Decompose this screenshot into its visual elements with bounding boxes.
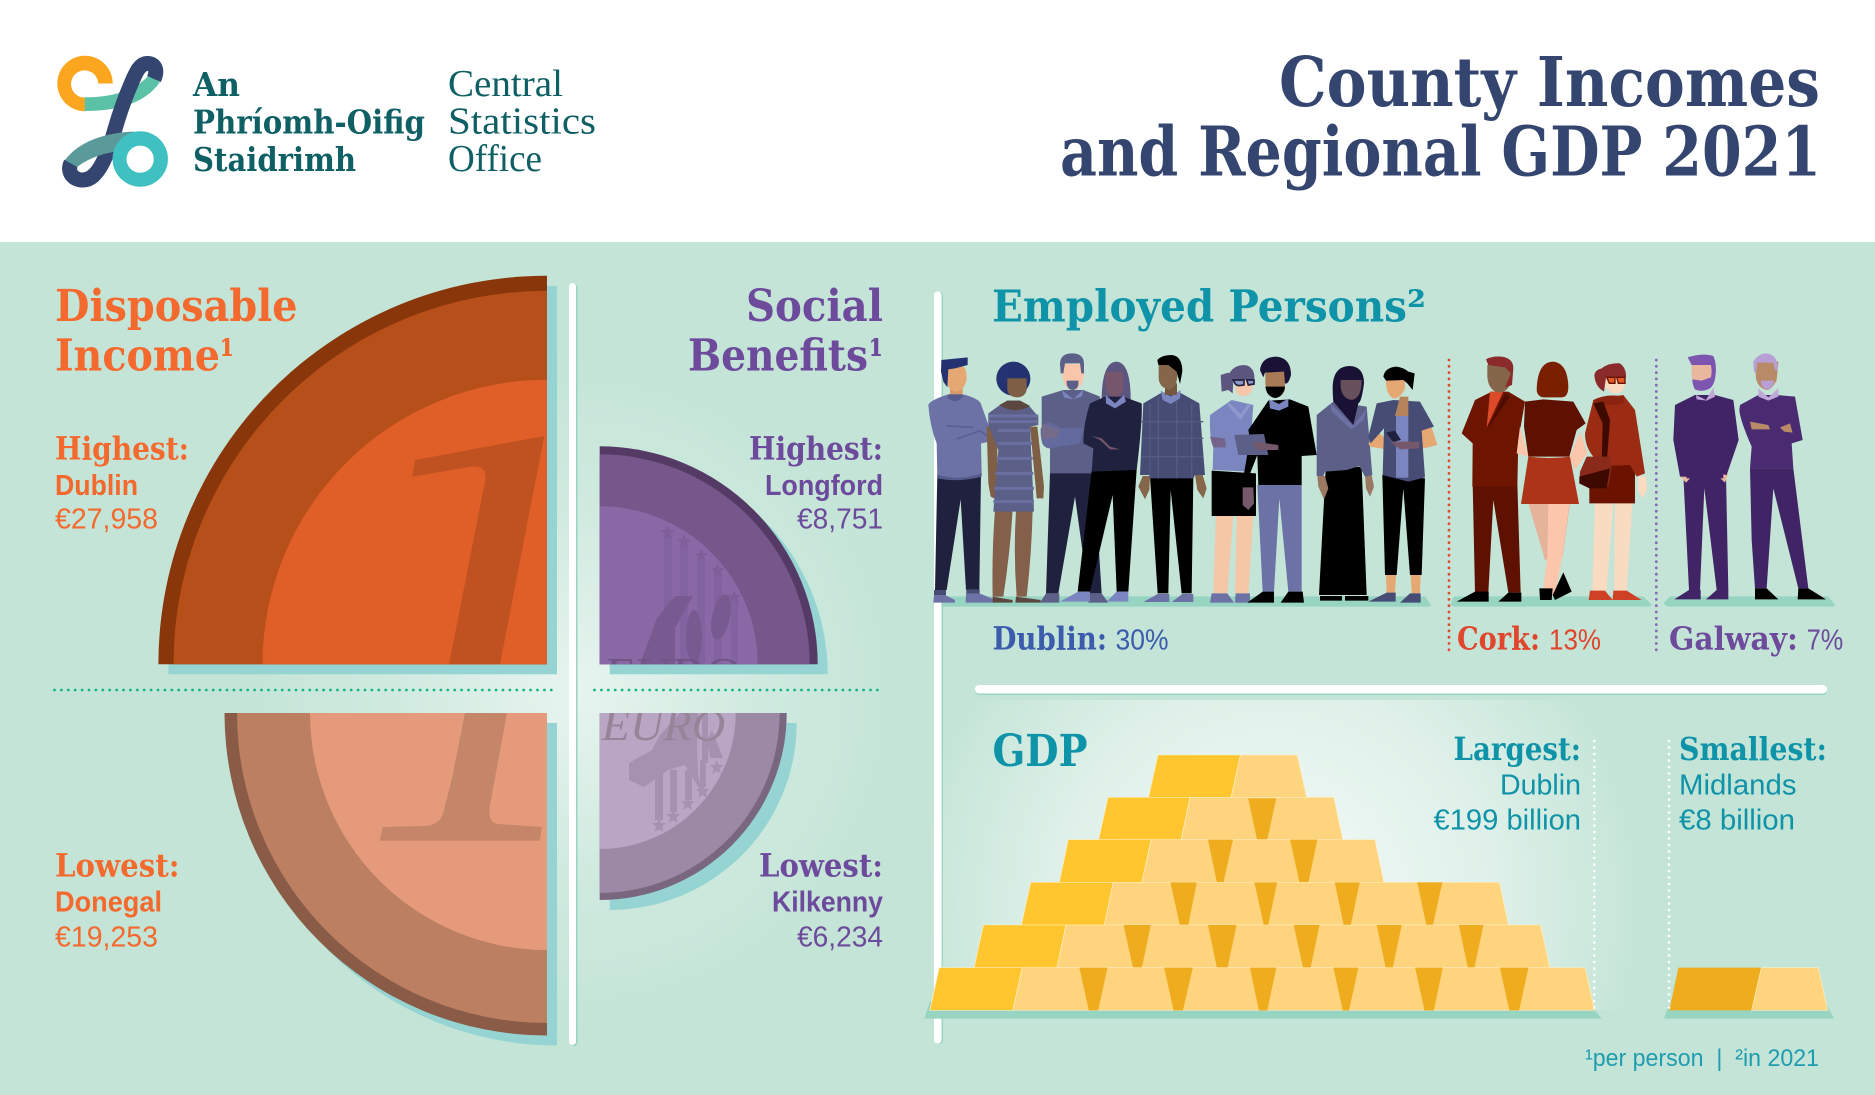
logo: Irish name: Staidrimh [193,140,356,179]
person 1 [928,357,996,603]
label: Cork share: Cork: [1457,619,1540,657]
label: Galway share: Galway: [1669,619,1798,657]
stat: highest benefits: Longford [765,470,883,502]
stat: lowest income: Lowest: [55,847,180,885]
label: Galway share: 7% [1807,624,1843,656]
stat: smallest GDP: €8 billion [1679,804,1795,836]
stat: largest GDP [1434,730,1581,836]
person 2 Cork [1517,362,1587,600]
heading: social benefits: ¹ [869,331,883,382]
dotted divider: Galway [1655,360,1658,650]
stat: highest benefits: Highest: [749,429,883,467]
footnote: ¹per person | ²in 2021 [1585,1045,1819,1072]
dotted divider: Cork [1448,360,1450,650]
person 2 [987,362,1044,603]
stat: highest benefits [749,429,883,535]
logo: English name: Statistics [448,100,596,142]
stat: highest benefits: €8,751 [797,503,883,535]
coin: lowest benefits: EURO [601,701,725,750]
stat: highest income: Highest: [55,429,189,467]
people: Dublin group [928,353,1437,607]
stat: highest income: Dublin [55,470,138,502]
dotted line: smallest [1668,741,1670,1008]
vertical divider right [934,292,943,1044]
stat: smallest GDP [1679,730,1827,836]
vertical divider left [569,283,578,1046]
stat: lowest income [55,847,180,954]
person 1 Galway [1673,355,1739,599]
panel: disposable income [55,276,557,1046]
logo: Irish name: Phríomh-Oifig [193,102,425,142]
gold stack: largest (Dublin) [924,755,1602,1019]
stat: smallest GDP: Smallest: [1679,730,1827,768]
people: Cork group [1451,357,1652,607]
dotted line left [54,689,552,691]
stat: lowest benefits: Lowest: [759,847,883,885]
panel: social benefits [600,281,883,954]
coin: highest benefits [600,446,828,699]
coin: highest benefits: EURO [606,648,742,699]
gold stack: smallest (Midlands) [1664,968,1834,1019]
heading: disposable income: Disposable [55,281,298,332]
stat: lowest income: €19,253 [55,922,158,954]
stat: largest GDP: €199 billion [1434,804,1581,836]
ground: Galway [1664,596,1835,607]
heading: employed persons: ² [1407,282,1426,332]
heading: GDP: GDP [992,726,1088,777]
stat: lowest benefits [759,847,883,954]
stat: highest income [55,429,189,535]
stat: largest GDP: Dublin [1500,770,1581,802]
ground: Dublin [943,596,1431,607]
person 3 Cork [1579,363,1647,600]
page background panel [0,242,1875,1095]
title [1060,43,1821,193]
gold glow [932,700,1645,1010]
stat: largest GDP: Largest: [1454,730,1581,768]
stat: lowest benefits: Kilkenny [772,887,883,919]
heading: social benefits: Benefits [688,331,868,382]
dotted line right [594,689,884,691]
person 8 [1317,366,1374,601]
person 5 [1138,355,1207,602]
logo: Irish name [192,65,425,179]
label: Cork share [1457,619,1601,657]
heading: social benefits [688,281,883,382]
person 1 Cork [1457,357,1525,602]
label: Dublin share: 30% [1116,624,1168,656]
heading: social benefits: Social [746,281,883,332]
coin: highest income [158,276,557,674]
stat: smallest GDP: Midlands [1679,770,1796,802]
coin: lowest income [224,713,557,1046]
person 4 [1060,362,1142,602]
logo: CSO mark [57,56,168,187]
person 9 [1368,367,1437,603]
logo: English name [448,63,596,180]
heading: disposable income: ¹ [220,331,234,382]
heading: disposable income: Income [55,331,220,382]
heading: employed persons: Employed Persons [992,282,1407,332]
ground: Cork [1451,596,1652,607]
person 6 [1210,365,1256,603]
stat: lowest income: Donegal [55,887,162,919]
stat: highest income: €27,958 [55,503,158,535]
label: Dublin share: Dublin: [992,619,1107,657]
person 3 [1040,353,1108,603]
header band [0,0,1875,242]
stat: lowest benefits: €6,234 [797,922,883,954]
logo: English name: Central [448,63,563,105]
dotted line: largest [1593,741,1596,1008]
label: Cork share: 13% [1549,624,1601,656]
heading: disposable income [55,281,298,382]
person 7 [1234,357,1317,603]
people: Galway group [1664,353,1835,607]
person 2 Galway [1739,353,1826,599]
horizontal divider [975,685,1827,695]
logo: Irish name: An [192,65,240,104]
coin: lowest benefits [600,701,797,910]
logo: English name: Office [448,138,542,180]
centre glow [150,270,1000,1095]
